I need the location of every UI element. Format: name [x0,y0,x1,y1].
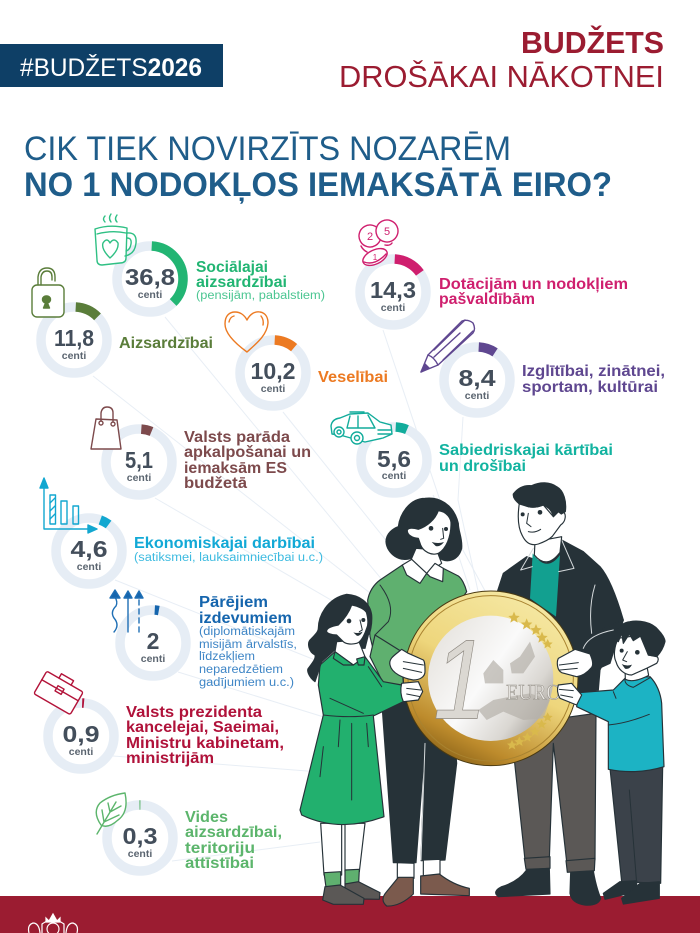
donut 11.8 [39,305,109,375]
label: other expenses [199,594,297,689]
label: defence: Aizsardzībai [119,335,213,352]
girl [300,594,423,904]
campaign heading: DROŠĀKAI NĀKOTNEI [339,59,664,94]
item: debt 5.1 [91,407,311,497]
donut 4.6 [47,509,131,593]
label: debt [184,429,311,492]
icon: police car [331,412,392,444]
donut 0.9: 0,9 [62,721,100,747]
icon: mug [95,214,136,265]
label: government: ministrijām [126,750,214,767]
main title: CIK TIEK NOVIRZĪTS NOZARĒM [24,130,511,168]
label: health: Veselībai [318,369,388,386]
label: public order: Sabiedriskajai kārtībai [439,442,613,459]
label: other expenses: izdevumiem [199,610,292,627]
label: economy [134,535,323,564]
donut 5.1: centi [127,472,151,484]
donut 14.3: centi [381,302,405,314]
donut 5.6: 5,6 [377,446,411,472]
label: other expenses: neparedzētiem [199,664,283,676]
label: environment: attīstībai [185,855,254,872]
icon: coins: 1 [373,253,378,262]
label: social protection [196,259,325,302]
donut 4.6: centi [77,561,101,573]
donut 2: centi [141,653,165,665]
item: environment 0.3 [96,793,282,872]
icon: coins: 5 [384,226,390,238]
item: defence 11.8 [32,268,213,375]
icon: pencil [421,320,474,372]
main title: NO 1 NODOKĻOS IEMAKSĀTĀ EIRO? [24,166,612,204]
donut 14.3: 14,3 [370,277,416,303]
donut 5.6: centi [382,470,406,482]
campaign heading [339,24,664,94]
donut 11.8: centi [62,350,86,362]
donut 14.3 [358,257,428,327]
item: social protection 36.8 [95,214,325,314]
label: environment [185,809,282,872]
icon: padlock [32,268,64,317]
icon: shopping bag [91,407,121,449]
coin: EURO [506,679,561,704]
icon: leaf [96,793,126,834]
icon: arrows [110,590,143,632]
label: debt: iemaksām ES [184,460,287,477]
label: economy: Ekonomiskajai darbībai [134,535,315,552]
icon: briefcase [34,667,86,715]
label: government [126,704,284,767]
label: education: Izglītībai, zinātnei, [522,363,665,380]
donut 8.4: centi [465,390,489,402]
label: social protection: (pensijām, pabalstiem) [196,290,325,302]
donut 2 [118,608,188,678]
donut 0.3: centi [128,848,152,860]
label: government: kancelejai, Saeimai, [126,719,279,736]
label: public order: un drošībai [439,458,526,475]
item: other expenses 2 [110,590,297,689]
donut 8.4: 8,4 [458,365,496,391]
donut 2: 2 [147,628,159,654]
donut 5.1 [104,427,174,497]
donut 0.3: 0,3 [122,823,158,849]
mother [368,498,469,906]
label: debt: Valsts parāda [184,429,290,446]
item: public order 5.6 [331,412,613,495]
donut 10.2: centi [261,383,285,395]
adult hands [370,620,623,685]
label: social protection: Sociālajai [196,259,268,276]
item: education 8.4 [421,320,665,415]
donut 36.8: 36,8 [125,264,175,290]
label: social protection: aizsardzībai [196,274,287,291]
label: environment: teritoriju [185,840,255,857]
label: public order [439,442,613,475]
label: economy: (satiksmei, lauksaimniecībai u.c.) [134,552,323,564]
boy [557,621,665,904]
donut 0.9: centi [69,746,93,758]
donut 10.2: 10,2 [250,358,296,384]
label: government: Ministru kabinetam, [126,735,284,752]
father [496,483,623,905]
coin: 1 [433,616,487,743]
hashtag banner: #BUDŽETS2026 [20,53,202,82]
item: economy 4.6 [40,478,323,593]
donut 5.6 [359,425,429,495]
donut 36.8 [115,244,185,314]
label: debt: budžetā [184,475,247,492]
donut 11.8: 11,8 [54,325,94,351]
item: municipalities 14.3 [355,217,628,327]
icon: bar chart [40,478,97,533]
main title [24,130,612,204]
label: municipalities: Dotācijām un nodokļiem [439,276,628,293]
illustration: family holding coin [300,483,665,906]
label: government: Valsts prezidenta [126,704,262,721]
label: other expenses: (diplomātiskajām [199,626,295,638]
connector lines [93,317,490,861]
label: debt: apkalpošanai un [184,444,311,461]
label: environment: Vides [185,809,228,826]
donut 8.4 [442,345,512,415]
label: municipalities [439,276,628,308]
donut 5.1: 5,1 [125,447,153,473]
donut 0.3 [106,804,174,872]
label: municipalities: pašvaldībām [439,291,535,308]
donut 10.2 [238,338,308,408]
campaign heading: BUDŽETS [521,24,664,60]
label: other expenses: gadījumiem u.c.) [199,677,294,689]
label: education: sportam, kultūrai [522,379,658,396]
emblem [28,914,78,933]
label: other expenses: līdzekļiem [199,651,255,663]
coin [403,591,578,766]
item: health 10.2 [225,312,388,408]
donut 0.9 [47,702,115,770]
icon: heart [225,312,268,352]
icon: coins: 2 [367,231,373,243]
label: other expenses: Pārējiem [199,594,268,611]
footer band [0,896,700,933]
label: education [522,363,665,396]
hashtag banner [0,44,223,87]
label: environment: aizsardzībai, [185,824,282,841]
item: government 0.9 [34,667,284,770]
icon: coins [355,217,401,269]
donut 4.6: 4,6 [70,536,108,562]
label: other expenses: misijām ārvalstīs, [199,639,297,651]
donut 36.8: centi [138,289,162,301]
